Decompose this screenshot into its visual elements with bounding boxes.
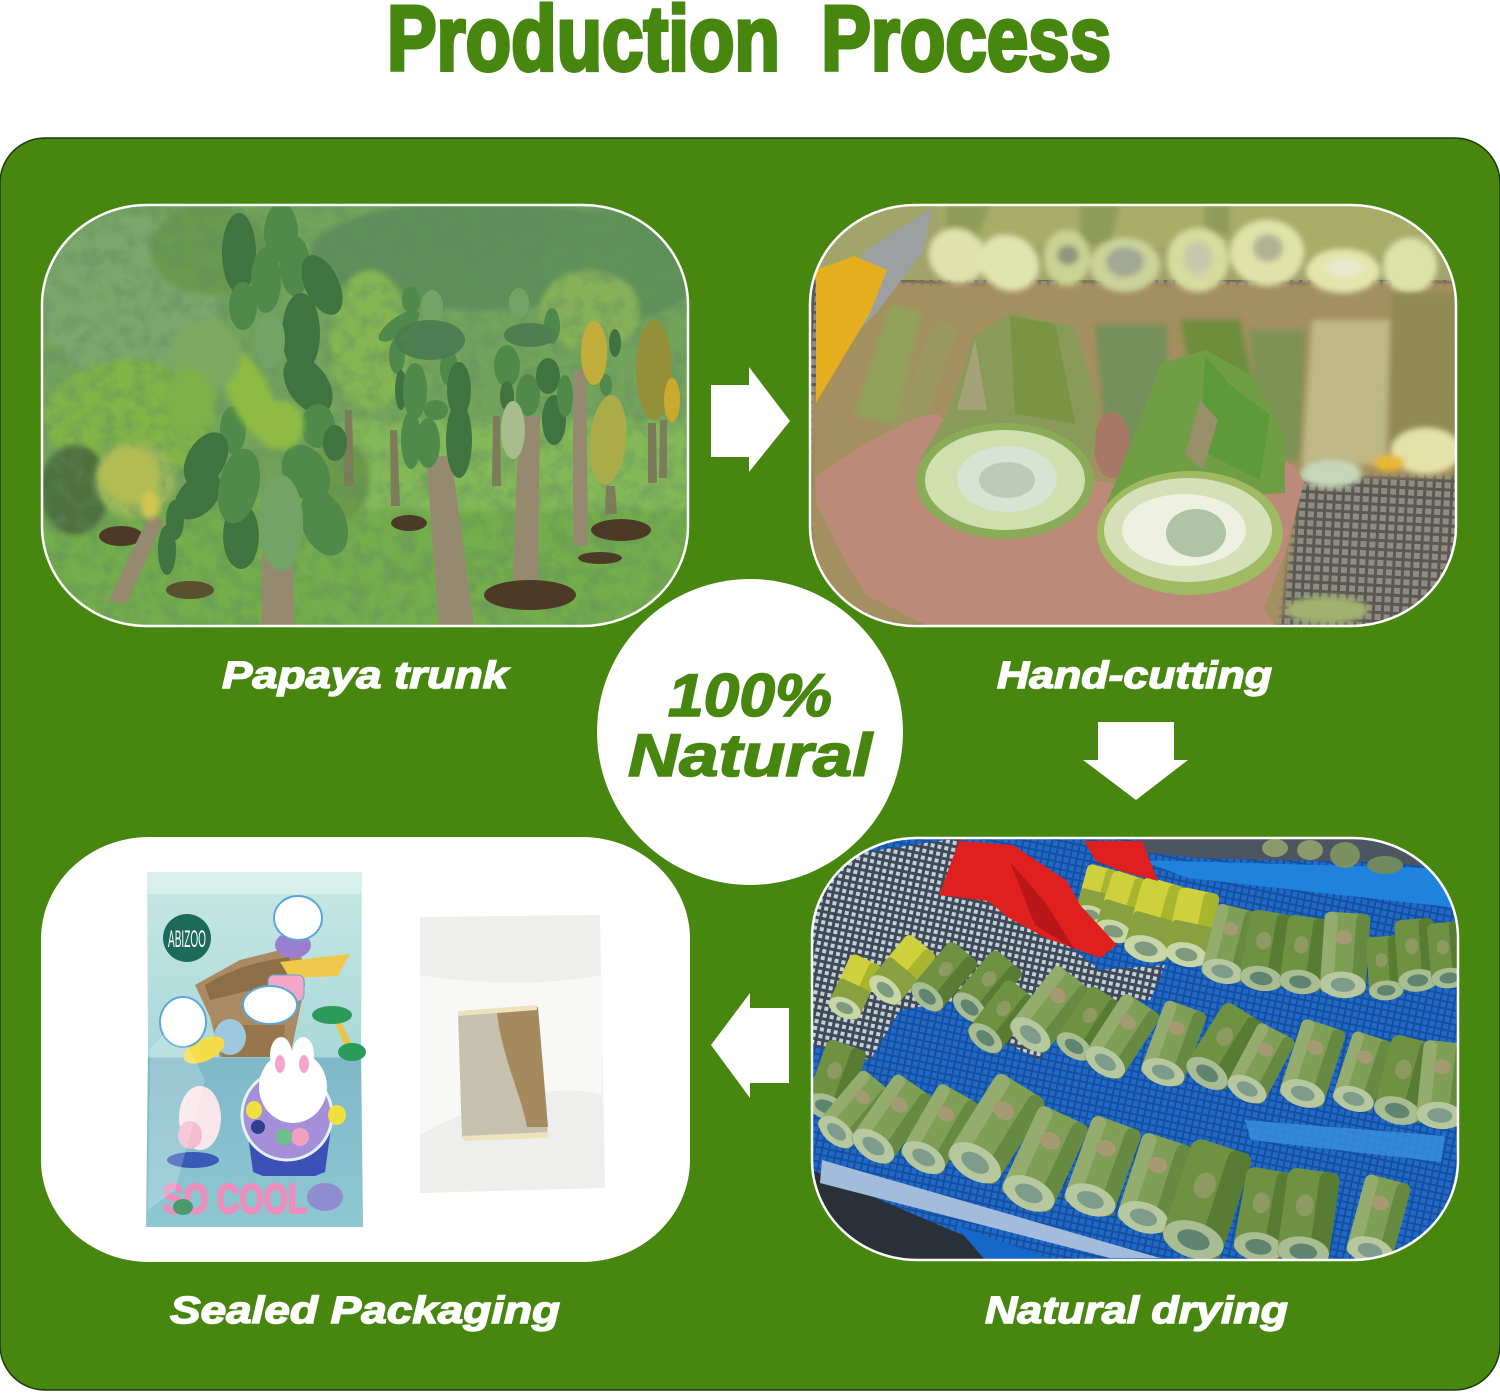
photo frame: hand-cutting bbox=[810, 205, 1456, 626]
highlight mesh patch bbox=[1245, 1120, 1445, 1162]
bunny: tumbling bbox=[243, 975, 304, 1024]
right cut trunk bbox=[1097, 350, 1285, 595]
label: natural drying: Natural drying bbox=[985, 1290, 1288, 1332]
middle row logs bbox=[825, 932, 1471, 1131]
top row logs bbox=[1073, 839, 1468, 1001]
background trunks bbox=[344, 410, 667, 514]
label: sealed packaging: Sealed Packaging bbox=[170, 1290, 560, 1332]
foliage and grass bbox=[40, 200, 700, 626]
arrow: left bbox=[711, 993, 789, 1098]
dried papaya pieces bbox=[195, 945, 305, 1057]
bright blue band bbox=[1140, 860, 1458, 908]
colourful pouch: ABIZOO bbox=[168, 926, 206, 953]
middle row of blurred logs bbox=[854, 293, 1461, 624]
palm tree bbox=[312, 1006, 366, 1061]
photo frame: papaya trunk bbox=[42, 205, 688, 626]
dark top band bbox=[1140, 839, 1424, 866]
photo: natural drying bbox=[802, 838, 1471, 1270]
bottom row logs bbox=[802, 1038, 1412, 1270]
front bright leaves bbox=[100, 319, 304, 519]
arrow: down bbox=[1083, 722, 1188, 800]
photo frame: natural drying bbox=[812, 838, 1458, 1260]
clear pouch bbox=[420, 915, 605, 1193]
bunny: surfer bbox=[160, 997, 246, 1069]
bunny: small left bbox=[167, 1086, 221, 1168]
papaya cluster: middle bbox=[374, 287, 472, 478]
papaya cluster: main bbox=[158, 203, 357, 575]
arrow: right bbox=[711, 367, 790, 472]
leaf texture bbox=[42, 205, 688, 626]
grey mesh bbox=[812, 838, 1165, 1060]
label: papaya trunk: Papaya trunk bbox=[222, 655, 510, 697]
badge: 100% natural: 100% bbox=[668, 662, 832, 729]
top row of cut logs bbox=[926, 206, 1440, 296]
panel: sealed packaging bbox=[41, 837, 690, 1262]
blurred tray bbox=[810, 205, 1456, 627]
brand badge bbox=[163, 914, 211, 962]
soil mounds bbox=[99, 515, 651, 610]
badge: 100% natural: Natural bbox=[628, 722, 874, 789]
label: hand-cutting: Hand-cutting bbox=[997, 655, 1272, 697]
yellowing leaves bbox=[581, 320, 680, 486]
So Cool lettering: SO COOL bbox=[163, 1175, 307, 1222]
left cut trunk bbox=[916, 313, 1098, 539]
front rail bbox=[814, 1170, 984, 1259]
red gloves bbox=[939, 841, 1158, 958]
photo: papaya trunk bbox=[40, 200, 700, 626]
bunny: swimmer top bbox=[274, 896, 350, 978]
papaya cluster: right bbox=[494, 288, 621, 459]
bunny: large in ring bbox=[242, 1037, 346, 1176]
photo: hand-cutting bbox=[810, 205, 1461, 628]
hand bbox=[816, 414, 1304, 628]
colourful pouch bbox=[146, 872, 366, 1227]
trunks bbox=[108, 370, 588, 626]
badge: 100% natural bbox=[597, 579, 903, 885]
